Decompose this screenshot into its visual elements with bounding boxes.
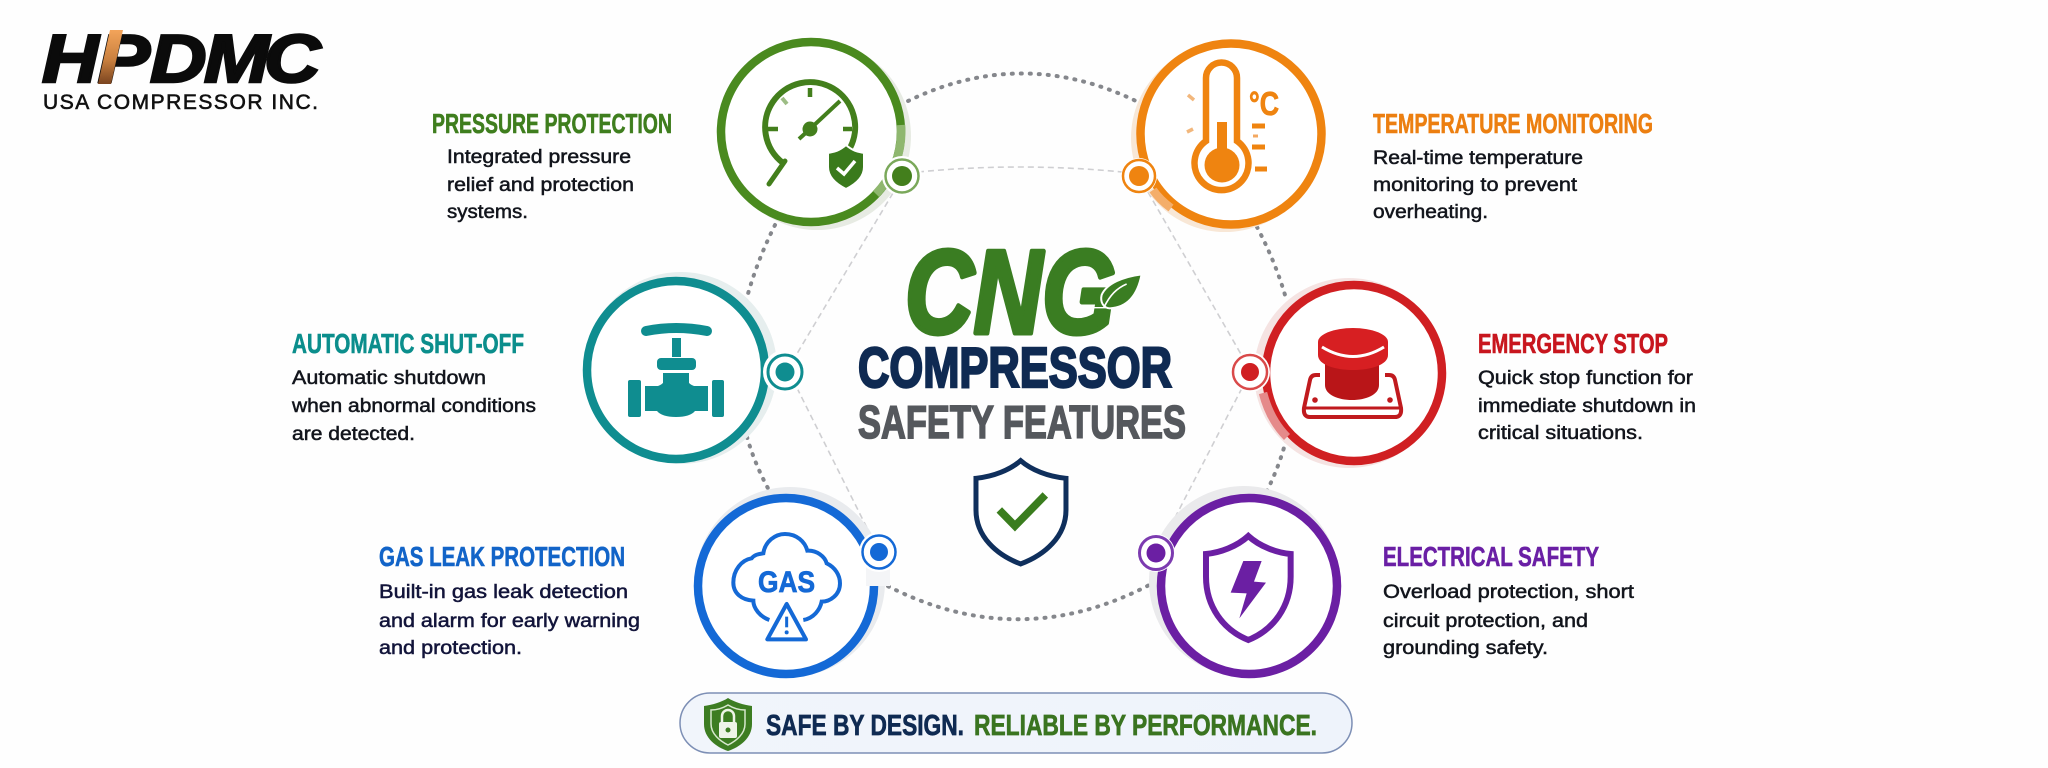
text: emergency stop description [1478,368,1696,444]
text: gas leak description: and alarm for early warning [379,611,640,632]
node: purple connector dot [1137,534,1175,572]
title line: CNG: CNG [905,226,1116,359]
banner pill [680,693,1352,753]
title: CNG compressor safety features [858,226,1186,448]
logo tagline: USA COMPRESSOR INC. [43,91,318,114]
text: electrical safety description [1383,582,1635,659]
icon: thermometer in orange ring: °C [1249,85,1279,122]
icon: gas cloud in blue ring: GAS [758,566,815,599]
title line: safety features: SAFETY FEATURES [858,396,1186,448]
node: blue connector dot [859,532,899,572]
text: temperature monitoring description [1373,148,1583,223]
icon: valve in teal ring [585,272,777,464]
logo: HPDMC USA Compressor Inc. [42,21,322,114]
heading: temperature monitoring: TEMPERATURE MONITORING [1373,108,1653,139]
banner text: RELIABLE BY PERFORMANCE. [974,710,1317,742]
title line: compressor: COMPRESSOR [858,336,1172,400]
node: orange connector dot [1121,158,1157,194]
text: temperature monitoring description: Real-time temperature [1373,148,1583,169]
heading: pressure protection: PRESSURE PROTECTION [432,108,672,139]
icon: lightning shield in purple ring [1149,486,1339,676]
text: emergency stop description: immediate shutdown in [1478,396,1696,417]
text: gas leak description: Built-in gas leak detection [379,582,628,603]
icon: emergency button in red ring [1254,278,1444,468]
node: teal connector dot [763,350,807,394]
text: automatic shut-off description: when abnormal conditions [291,396,536,417]
text: temperature monitoring description: monitoring to prevent [1373,175,1578,196]
logo wordmark: HPDMC [42,21,322,97]
text: pressure protection description: relief and protection [447,175,634,196]
heading: automatic shut-off: AUTOMATIC SHUT-OFF [292,328,524,359]
text: pressure protection description [447,147,634,223]
text: automatic shut-off description [291,368,536,445]
text: electrical safety description: circuit protection, and [1383,611,1588,632]
text: pressure protection description: systems. [447,202,528,223]
text: gas leak description [379,582,640,659]
text: pressure protection description: Integrated pressure [447,147,631,168]
text: emergency stop description: Quick stop function for [1478,368,1694,389]
panel: pressure protection [432,42,922,230]
icon: central shield with check [976,461,1066,564]
icon: thermometer in orange ring [1131,44,1322,232]
icon: lock shield [704,698,752,751]
banner text: SAFE BY DESIGN. [766,710,964,742]
panel: automatic shut-off [291,272,807,464]
heading: emergency stop: EMERGENCY STOP [1478,328,1668,359]
node: red connector dot [1230,352,1270,392]
icon: gas cloud in blue ring [695,487,890,677]
text: electrical safety description: Overload protection, short [1383,582,1635,603]
logo copper slash [98,30,123,84]
heading: electrical safety: ELECTRICAL SAFETY [1383,541,1599,572]
icon: leaf [1090,274,1142,308]
text: electrical safety description: grounding safety. [1383,638,1548,659]
heading: gas leak protection: GAS LEAK PROTECTION [379,541,625,572]
text: gas leak description: and protection. [379,638,522,659]
text: automatic shut-off description: Automatic shutdown [292,368,486,389]
panel: emergency stop [1230,278,1696,468]
text: temperature monitoring description: overheating. [1373,202,1488,223]
icon: pressure gauge in green ring [721,42,911,230]
text: emergency stop description: critical situations. [1478,423,1643,444]
panel: gas leak protection [379,487,899,677]
panel: electrical safety [1137,486,1635,676]
node: green connector dot [882,156,922,196]
network: thin dashed hexagon lines [795,167,1242,537]
network: dotted ring connecting features [745,73,1287,619]
banner text [766,710,1317,742]
text: automatic shut-off description: are detected. [292,424,415,445]
panel: temperature monitoring [1121,44,1653,232]
callout: safe by design banner [680,693,1352,753]
